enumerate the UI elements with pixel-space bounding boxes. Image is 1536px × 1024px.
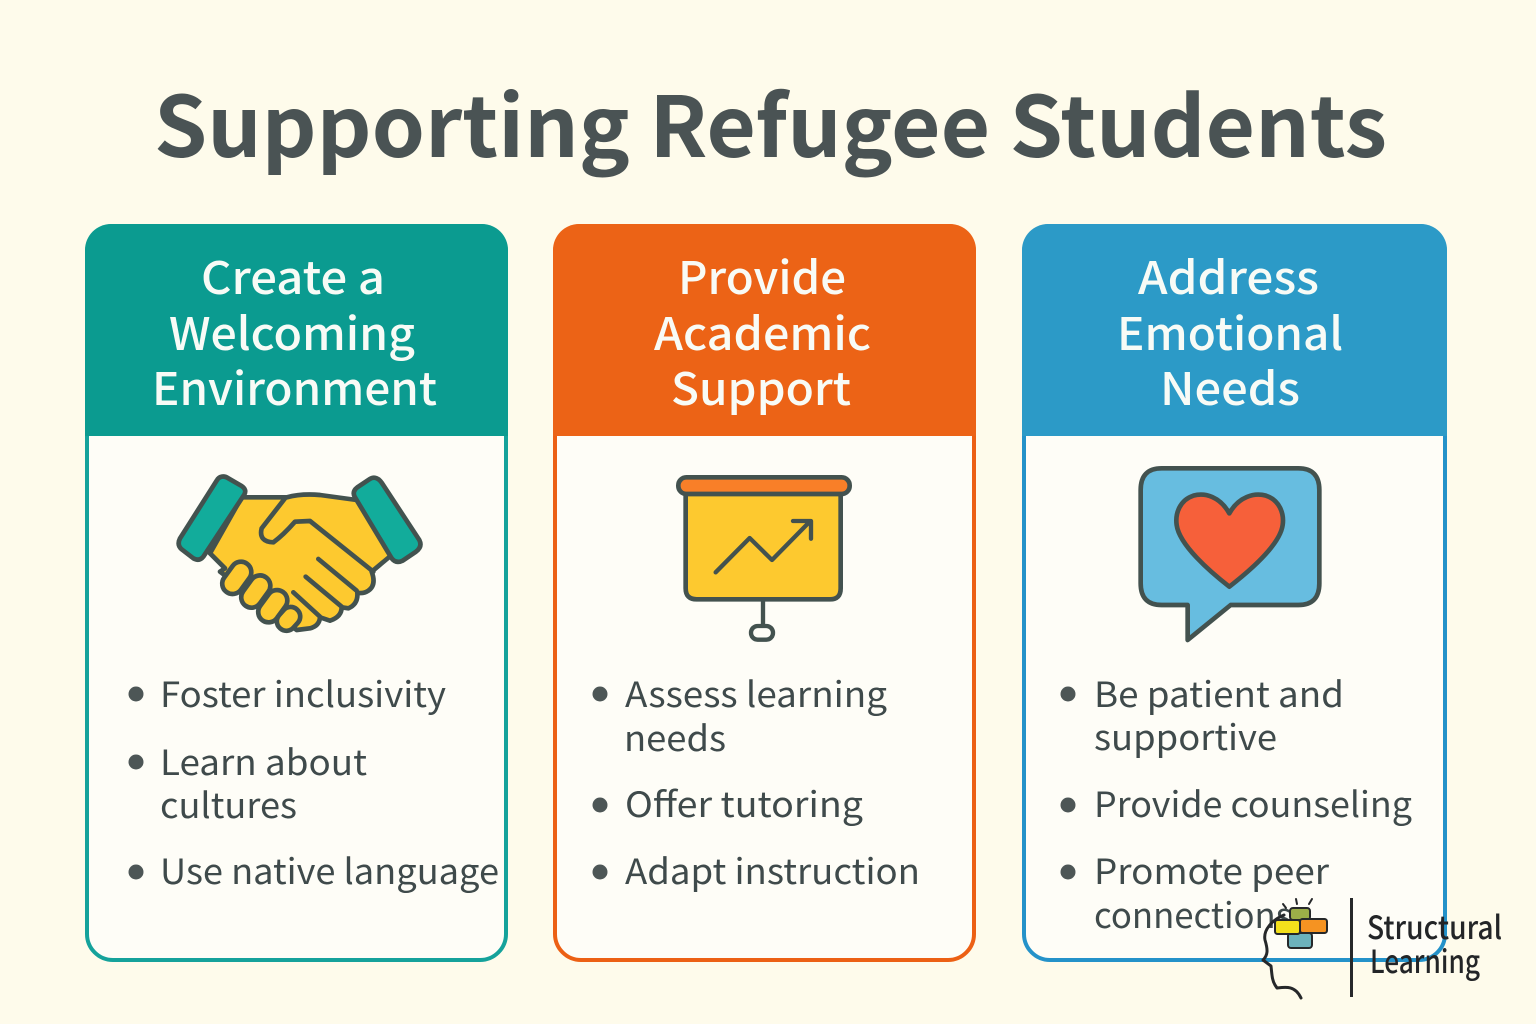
list: welcoming environment bullets: Foster inclusivity — [160, 667, 446, 718]
panel: address emotional needs — [1022, 224, 1447, 960]
heading: create a welcoming environment — [152, 242, 437, 418]
title: Supporting Refugee Students — [154, 61, 1387, 182]
list: emotional needs bullets — [1060, 667, 1412, 939]
heading: create a welcoming environment: Create a — [201, 242, 385, 307]
list: emotional needs bullets: Provide counseling — [1094, 777, 1412, 828]
list: welcoming environment bullets: Use native language — [160, 844, 499, 895]
icon: speech bubble with heart — [1141, 468, 1319, 640]
list: academic support bullets: needs — [624, 711, 726, 762]
icon: handshake — [179, 477, 420, 635]
list: welcoming environment bullets — [128, 667, 499, 895]
logo divider — [1350, 898, 1353, 997]
heading: address emotional needs: Emotional — [1117, 298, 1343, 363]
heading: provide academic support: Academic — [654, 298, 871, 363]
list: emotional needs bullets: Be patient and — [1094, 667, 1344, 718]
list: academic support bullets — [592, 667, 920, 895]
list: emotional needs bullets: connections — [1094, 888, 1292, 939]
panel: provide academic support — [553, 224, 976, 960]
heading: provide academic support: Support — [671, 353, 851, 418]
logo wordmark: Structural — [1367, 903, 1502, 949]
list: academic support bullets: Adapt instruction — [625, 844, 920, 895]
logo: structural learning — [1263, 898, 1502, 998]
panel: create a welcoming environment — [85, 224, 508, 960]
list: welcoming environment bullets: Learn about — [160, 735, 367, 786]
heading: provide academic support: Provide — [678, 242, 846, 307]
list: emotional needs bullets: Promote peer — [1094, 844, 1329, 895]
icon: presentation board with rising chart — [678, 477, 850, 640]
list: academic support bullets: Offer tutoring — [625, 777, 863, 828]
heading: address emotional needs — [1117, 242, 1343, 418]
logo wordmark: Learning — [1370, 937, 1480, 983]
logo icon: head with coloured blocks — [1263, 899, 1327, 998]
heading: create a welcoming environment: Environment — [152, 353, 437, 418]
logo wordmark — [1367, 903, 1502, 983]
list: welcoming environment bullets: cultures — [160, 778, 297, 829]
list: academic support bullets: Assess learning — [625, 667, 887, 718]
heading: address emotional needs: Address — [1138, 242, 1319, 307]
heading: create a welcoming environment: Welcoming — [169, 298, 415, 363]
heading: address emotional needs: Needs — [1160, 353, 1300, 418]
list: emotional needs bullets: supportive — [1094, 710, 1277, 761]
heading: provide academic support — [654, 242, 871, 418]
